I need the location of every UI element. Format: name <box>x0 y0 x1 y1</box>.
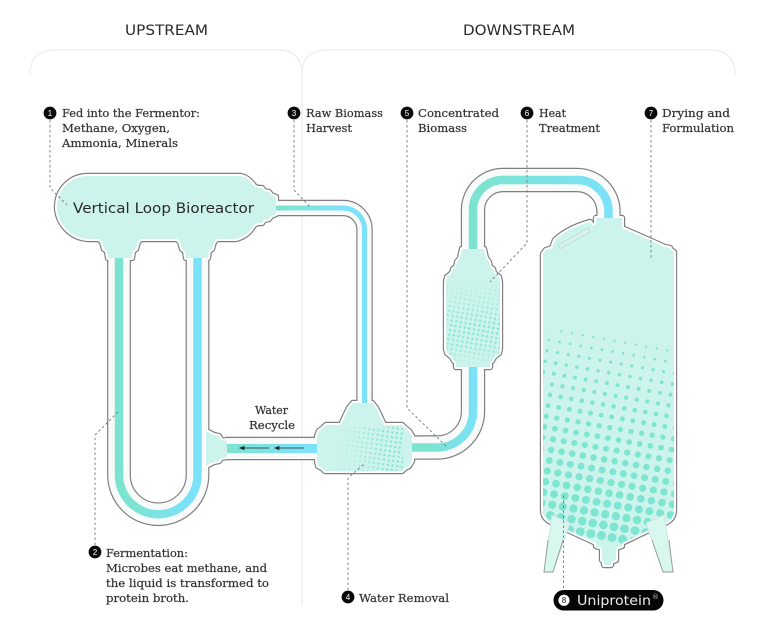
step 5 label: 5 <box>405 109 410 118</box>
vessel halos <box>57 176 674 565</box>
water recycle label: Water <box>255 403 288 417</box>
water recycle label: Recycle <box>249 418 295 432</box>
heat treatment unit dot texture <box>447 278 500 363</box>
step 1 label: 1 <box>48 109 53 118</box>
step 5 label: Biomass <box>418 121 467 135</box>
step 3 label <box>288 106 383 135</box>
step 2 label: the liquid is transformed to <box>106 576 269 590</box>
step 8 product pill: Uniprotein: ® <box>652 593 659 601</box>
step 7 label: 7 <box>649 109 654 118</box>
section bracket: upstream <box>30 50 302 605</box>
step 7 label <box>645 106 735 135</box>
step 2 label: protein broth. <box>106 591 189 605</box>
arrow: water recycle 1 <box>240 446 269 450</box>
step 1 label: Methane, Oxygen, <box>62 121 170 135</box>
tank leg: left <box>544 515 570 572</box>
step 4 label: 4 <box>346 593 351 602</box>
step 7 label: Drying and <box>662 106 731 120</box>
step 1 label: Fed into the Fermentor: <box>62 106 200 120</box>
leader lines <box>50 120 651 590</box>
step 1 label <box>44 106 200 150</box>
step 6 label: Treatment <box>539 121 600 135</box>
step 6 label: Heat <box>539 106 566 120</box>
coloured flow bands <box>119 180 608 514</box>
step 6 label <box>521 106 600 135</box>
heading: upstream: UPSTREAM <box>125 23 208 39</box>
heading: downstream: DOWNSTREAM <box>463 23 575 39</box>
pipe interiors <box>119 180 608 514</box>
tank protein dots <box>543 330 674 544</box>
arrow: water recycle 2 <box>275 446 304 450</box>
step 2 label: 2 <box>93 548 98 557</box>
step 4 label: Water Removal <box>359 591 449 605</box>
step 1 label: Ammonia, Minerals <box>61 136 178 150</box>
step 5 label: Concentrated <box>418 106 500 120</box>
water removal unit dot texture <box>338 427 403 471</box>
step 3 label: 3 <box>292 109 297 118</box>
vessel label: bioreactor: Vertical Loop Bioreactor <box>73 201 254 217</box>
step 2 label: Fermentation: <box>106 546 188 560</box>
step 8 product pill: Uniprotein: Uniprotein <box>577 594 651 609</box>
step 5 label <box>401 106 500 135</box>
water recycle label <box>249 403 295 432</box>
tank leg: right <box>646 515 673 572</box>
step 8 product pill: Uniprotein <box>554 590 664 610</box>
step 6 label: 6 <box>525 109 530 118</box>
step 8 product pill: Uniprotein: 8 <box>562 596 567 605</box>
vessel and pipe outlines <box>57 176 674 565</box>
step 2 label: Microbes eat methane, and <box>106 561 268 575</box>
section bracket: downstream <box>302 50 735 75</box>
step 3 label: Raw Biomass <box>306 106 383 120</box>
step 2 label <box>89 546 269 605</box>
step 3 label: Harvest <box>306 121 352 135</box>
step 7 label: Formulation <box>662 121 735 135</box>
vessel bodies <box>57 176 674 565</box>
tank hatch <box>558 228 590 249</box>
